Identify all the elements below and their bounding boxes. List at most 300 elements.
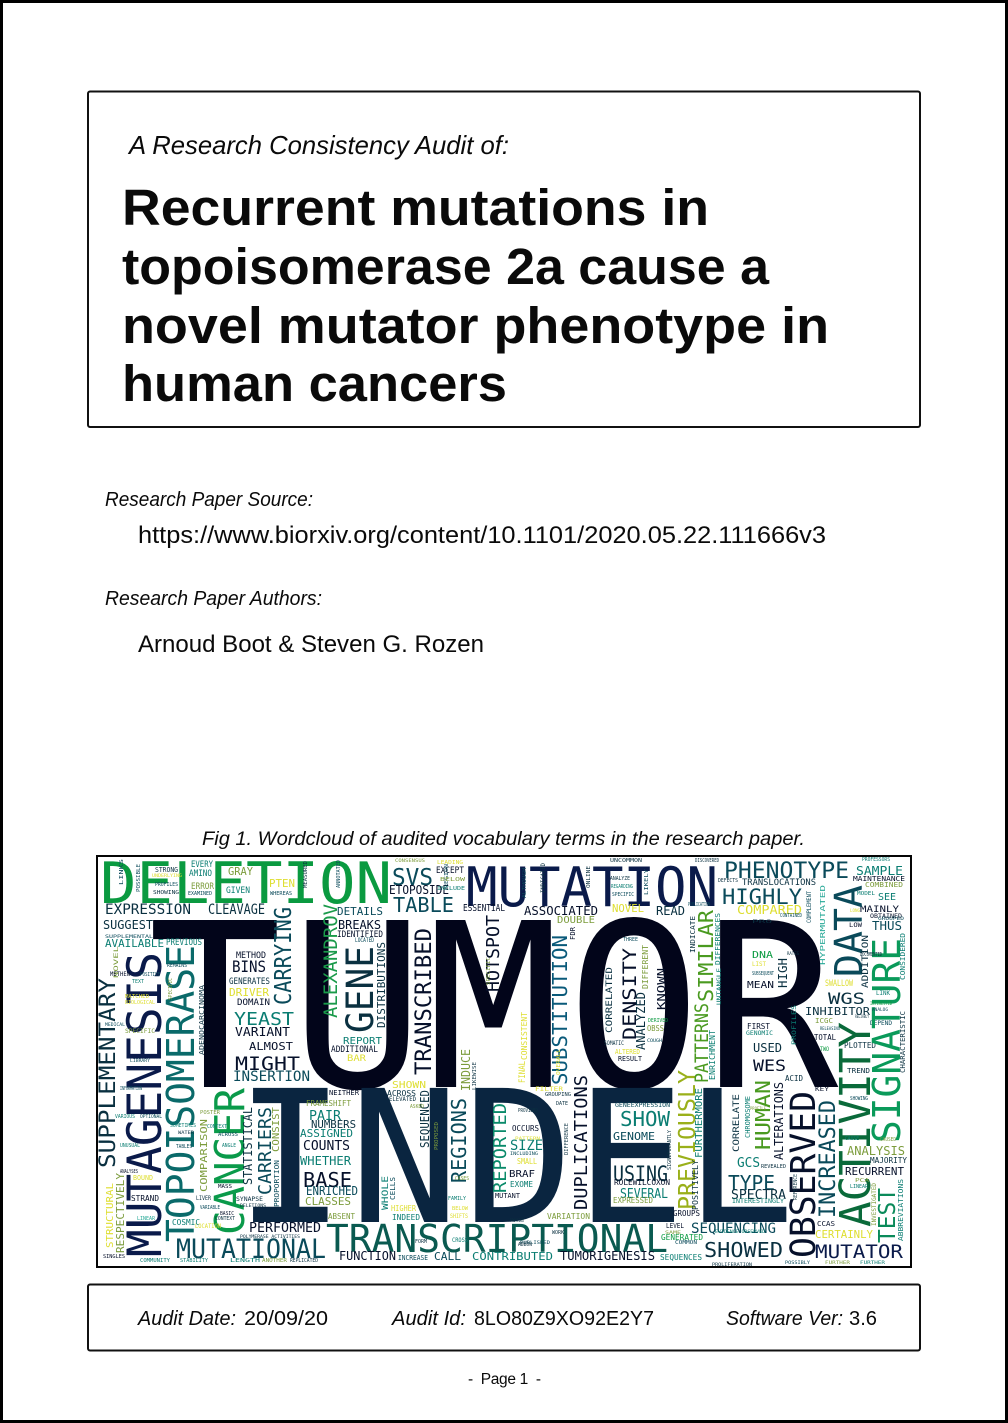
wordcloud: ASSOCIATED bbox=[524, 904, 598, 918]
rotated words: CONSIDERED bbox=[899, 933, 907, 980]
wordcloud: SOMATIC bbox=[604, 1040, 624, 1047]
wordcloud: EVERY bbox=[191, 860, 213, 870]
wordcloud: ACID bbox=[785, 1074, 803, 1083]
wordcloud: ELEVATED bbox=[389, 1096, 416, 1103]
wordcloud: MAINTENANCE bbox=[853, 875, 905, 883]
wordcloud: COMPARED bbox=[737, 903, 802, 917]
rotated words: CHARACTERISTIC bbox=[899, 1011, 907, 1073]
wordcloud: DELETION bbox=[100, 851, 392, 917]
wordcloud: TUMORIGENESIS bbox=[560, 1249, 655, 1263]
rotated words: INVESTIGATED bbox=[871, 1183, 878, 1226]
wordcloud: USING bbox=[613, 1162, 668, 1186]
rotated words: POSSIBLE bbox=[136, 864, 142, 892]
audit date: 20/09/20 bbox=[244, 1308, 328, 1330]
wordcloud: TWO bbox=[820, 1046, 829, 1053]
rotated words: PROPORTION bbox=[273, 1160, 281, 1207]
wordcloud: MUTATOR bbox=[815, 1241, 904, 1263]
rotated words: NOVEL bbox=[113, 945, 120, 978]
wordcloud: PERFORMED bbox=[249, 1221, 321, 1236]
wordcloud: SAMPLE bbox=[856, 864, 903, 878]
wordcloud: PTEN bbox=[269, 877, 295, 890]
small scattered words: CONTEXT bbox=[215, 1216, 235, 1222]
small scattered words: PROLIFERATION bbox=[712, 1262, 753, 1267]
wordcloud: SEVERAL bbox=[620, 1187, 668, 1202]
rotated words: ADDITION bbox=[861, 935, 871, 988]
small scattered words: SHOWING bbox=[850, 1096, 868, 1102]
wordcloud: ADDITIONAL bbox=[331, 1045, 378, 1055]
wordcloud: SMALL bbox=[517, 1157, 537, 1166]
wordcloud: DOMAIN bbox=[237, 998, 270, 1008]
small scattered words: RELEASING bbox=[820, 1026, 841, 1031]
rotated words: FURTHERMORE bbox=[694, 1088, 705, 1158]
rotated words: ANALYZED bbox=[634, 992, 648, 1050]
small scattered words: MATCHED bbox=[125, 994, 149, 1000]
small scattered words: MASS bbox=[218, 1184, 232, 1190]
small scattered words: WORK bbox=[552, 1230, 564, 1236]
wordcloud: HIGHLY bbox=[722, 885, 802, 909]
wordcloud: YEAST bbox=[234, 1009, 294, 1030]
small scattered words: TABLES bbox=[176, 1144, 192, 1150]
rotated words: KNOWN bbox=[655, 968, 668, 1010]
rotated words: ONLINE bbox=[586, 866, 592, 888]
wordcloud: SUGGEST bbox=[103, 918, 153, 932]
paper authors: Arnoud Boot & Steven G. Rozen bbox=[138, 631, 484, 658]
wordcloud: PAIR bbox=[309, 1109, 341, 1124]
wordcloud: STRAND bbox=[131, 1194, 159, 1203]
main title: topoisomerase 2a cause a bbox=[122, 238, 770, 295]
rotated words: REFERENCE bbox=[793, 1174, 799, 1200]
wordcloud: ALTERED bbox=[615, 1048, 640, 1056]
wordcloud: BRAF bbox=[509, 1169, 535, 1180]
rotated words: INDUCE bbox=[459, 1049, 473, 1091]
title panel bbox=[88, 92, 920, 427]
wordcloud: SEQUENCES bbox=[660, 1253, 702, 1262]
rotated words: HOTSPOT bbox=[483, 915, 504, 992]
wordcloud: FUNCTION bbox=[339, 1249, 396, 1263]
rotated words: CONSISTENT bbox=[520, 1012, 529, 1060]
small scattered words: ANALYZE bbox=[610, 876, 630, 882]
small scattered words: FURTHER bbox=[825, 1260, 851, 1265]
rotated words: SPECIFIC bbox=[486, 957, 492, 985]
software version: Software Ver: bbox=[726, 1308, 843, 1330]
small scattered words: SPECIFIC bbox=[612, 892, 634, 898]
small scattered words: DOCUMENTED bbox=[860, 952, 882, 958]
rotated words: LINKS bbox=[119, 859, 125, 885]
small scattered words: BELOW bbox=[440, 877, 467, 883]
wordcloud: TREND bbox=[847, 1067, 870, 1075]
rotated words: SIGNIFICANTLY bbox=[667, 1130, 673, 1170]
small scattered words: VARIOUS bbox=[115, 1114, 135, 1120]
small scattered words: COUGH bbox=[647, 1038, 663, 1043]
wordcloud: IDENTIFIED bbox=[337, 930, 383, 940]
wordcloud: CONTRIBUTED bbox=[472, 1250, 553, 1263]
paper source: https://www.biorxiv.org/content/10.1101/2020.05.22.111666v3 bbox=[138, 522, 826, 549]
small scattered words: CAUSE bbox=[845, 1136, 859, 1142]
wordcloud: GENERATES bbox=[229, 977, 270, 987]
main title: Recurrent mutations in bbox=[122, 179, 709, 236]
wordcloud: MUTATION bbox=[466, 856, 718, 919]
wordcloud: TYPE bbox=[728, 1171, 775, 1195]
wordcloud: THREE bbox=[623, 937, 638, 943]
figure caption: Fig 1. Wordcloud of audited vocabulary terms in the research paper. bbox=[202, 828, 805, 850]
small scattered words: PATTERN bbox=[515, 1136, 541, 1141]
small scattered words: DELETIONS bbox=[240, 1203, 267, 1208]
small scattered words: CAUSED bbox=[880, 1137, 896, 1143]
small scattered words: CONSENSUS bbox=[395, 858, 426, 863]
wordcloud: LIVER bbox=[196, 1195, 211, 1202]
wordcloud: OBTAINED bbox=[870, 913, 902, 920]
software version: 3.6 bbox=[849, 1308, 877, 1330]
wordcloud: VARIATION bbox=[547, 1212, 590, 1221]
wordcloud: NEITHER bbox=[329, 1089, 360, 1097]
rotated words: TOPOISOMERASE bbox=[159, 945, 203, 1242]
small scattered words: SHIFTS bbox=[450, 1213, 468, 1220]
wordcloud: LEVEL bbox=[666, 1222, 684, 1230]
wordcloud: RESULT bbox=[618, 1055, 643, 1063]
small scattered words: UNUSUAL bbox=[120, 1143, 140, 1149]
wordcloud: BAR bbox=[347, 1054, 367, 1064]
small scattered words: LONG bbox=[850, 908, 861, 913]
wordcloud: ICGC bbox=[815, 1017, 833, 1025]
wordcloud: INCREASE bbox=[398, 1254, 428, 1262]
small scattered words: SUBSEQUENT bbox=[752, 971, 774, 977]
small scattered words: TEXT bbox=[132, 979, 144, 985]
wordcloud: COMBINED bbox=[865, 881, 903, 889]
wordcloud: EXCEPT bbox=[436, 866, 464, 876]
wordcloud: OCCURS bbox=[512, 1124, 539, 1133]
rotated words: LIKEWISE bbox=[472, 1062, 478, 1090]
wordcloud: SVS bbox=[392, 865, 433, 891]
wordcloud: METHOD bbox=[236, 951, 266, 961]
small scattered words: CROSS bbox=[452, 1237, 468, 1244]
small scattered words: PROVIDED bbox=[510, 1218, 524, 1223]
footer panel bbox=[88, 1284, 920, 1350]
small scattered words: LOCATION bbox=[195, 1223, 221, 1230]
wordcloud: SPECTRA bbox=[731, 1188, 786, 1203]
wordcloud: SEQUENCING bbox=[691, 1221, 776, 1237]
small scattered words: ALLOW bbox=[518, 1242, 533, 1248]
wordcloud: MAJORITY bbox=[870, 1156, 907, 1165]
small scattered words: ACROSS bbox=[218, 1132, 238, 1138]
wordcloud: THUS bbox=[872, 919, 902, 933]
wordcloud: TRANSLOCATIONS bbox=[742, 878, 816, 888]
wordcloud: ANALYSIS bbox=[847, 1144, 905, 1158]
rotated words: SEQUENCED bbox=[418, 1090, 432, 1148]
wordcloud: LINK bbox=[876, 990, 890, 997]
small scattered words: DEFECTS bbox=[718, 878, 738, 884]
rotated words: DUPLICATIONS bbox=[571, 1075, 592, 1210]
rotated words: INCREASED bbox=[816, 1100, 841, 1218]
wordcloud bbox=[96, 851, 911, 1267]
small scattered words: SUPPLEMENTAL bbox=[105, 934, 154, 939]
small scattered words: UNDERLYING bbox=[152, 873, 183, 878]
small scattered words: ANGLE bbox=[222, 1143, 236, 1149]
wordcloud: INSERTION bbox=[233, 1069, 310, 1085]
small scattered words: DERIVED bbox=[648, 1018, 668, 1024]
wordcloud: AVAILABLE bbox=[105, 937, 164, 950]
rotated words: GENE bbox=[339, 946, 382, 1033]
small scattered words: PROFILES bbox=[155, 882, 178, 888]
small scattered words: COMMUNITY bbox=[140, 1258, 170, 1264]
small scattered words: MODEL bbox=[857, 891, 875, 897]
rotated words: SIGNATURE bbox=[865, 938, 909, 1143]
audit id: 8LO80Z9XO92E2Y7 bbox=[474, 1308, 654, 1330]
wordcloud: SYNAPSE bbox=[236, 1196, 263, 1203]
main title: novel mutator phenotype in bbox=[122, 297, 829, 354]
rotated words: REGIONS bbox=[447, 1098, 471, 1183]
wordcloud: CLEAVAGE bbox=[208, 902, 265, 918]
small scattered words: POLYMERASE ACTIVITIES bbox=[240, 1234, 301, 1239]
rotated words: ANNOTATED bbox=[336, 860, 342, 888]
rotated words: ALEXANDROV bbox=[320, 904, 342, 1018]
rotated words: ALTHOUGH bbox=[522, 868, 528, 898]
rotated words: MEASURED bbox=[303, 861, 309, 888]
small scattered words: BIOLOGICAL bbox=[125, 1000, 155, 1006]
small scattered words: CONTAINED bbox=[780, 913, 802, 919]
wordcloud: ALMOST bbox=[249, 1040, 293, 1053]
wordcloud: SHOW bbox=[620, 1107, 671, 1131]
rotated words: HUMAN bbox=[751, 1080, 775, 1150]
small scattered words: FORM bbox=[415, 1239, 427, 1245]
small scattered words: ANALYSES bbox=[120, 1169, 138, 1175]
small scattered words: POSTER bbox=[200, 1110, 221, 1116]
rotated words: STRUCTURAL bbox=[105, 1183, 116, 1248]
small scattered words: BOUND bbox=[133, 1174, 153, 1182]
rotated words: WHOLE bbox=[381, 1176, 391, 1210]
small scattered words: WATER bbox=[178, 1130, 195, 1135]
small scattered words: PUBLICATION bbox=[688, 902, 710, 908]
small scattered words: UNCOMMON bbox=[610, 858, 642, 864]
wordcloud: DRIVER bbox=[229, 986, 269, 999]
rotated words: OBSERVED bbox=[784, 1091, 824, 1258]
wordcloud: FRAMESHIFT bbox=[306, 1099, 351, 1108]
wordcloud: GENOME bbox=[613, 1130, 655, 1143]
wordcloud: INHIBITOR bbox=[805, 1005, 870, 1018]
rotated words: TEST bbox=[875, 1188, 901, 1243]
wordcloud: REPORT bbox=[343, 1036, 382, 1047]
wordcloud: FIRST bbox=[747, 1022, 770, 1031]
wordcloud: ABSENT bbox=[328, 1212, 355, 1221]
wordcloud: SEE bbox=[878, 892, 896, 903]
rotated words: SUBSTITUTION bbox=[548, 935, 572, 1085]
rotated words: DENSITY bbox=[619, 947, 641, 1040]
rotated words: CHROMOSOME bbox=[744, 1096, 752, 1138]
small scattered words: SINGLES bbox=[103, 1254, 125, 1260]
small scattered words: SOMETIMES bbox=[170, 1123, 196, 1129]
rotated words: ALTERATIONS bbox=[772, 1082, 786, 1160]
wordcloud: SIZE bbox=[510, 1138, 543, 1154]
wordcloud: WGS bbox=[828, 989, 865, 1008]
wordcloud: CERTAINLY bbox=[815, 1228, 873, 1241]
small scattered words: REPLICATED bbox=[290, 1258, 318, 1264]
rotated words: ABBREVIATIONS bbox=[897, 1179, 905, 1241]
rotated words: COMPARISON bbox=[199, 1119, 210, 1192]
small scattered words: METHEN bbox=[110, 971, 130, 978]
wordcloud: MUTANT bbox=[495, 1192, 521, 1200]
small scattered words: PCA bbox=[855, 1178, 869, 1184]
small scattered words: REGARDING bbox=[611, 884, 633, 890]
wordcloud: COSMIC bbox=[172, 1218, 200, 1227]
wordcloud: MUTATIONAL bbox=[176, 1234, 326, 1265]
wordcloud: DEPEND bbox=[870, 1020, 892, 1027]
small scattered words: GROUPED bbox=[878, 916, 905, 921]
audit id bbox=[391, 1308, 654, 1330]
wordcloud: DETAILS bbox=[337, 905, 383, 918]
wordcloud: READ bbox=[656, 904, 685, 918]
rotated words: DISTRIBUTIONS bbox=[375, 942, 388, 1028]
small scattered words: INCLUDING bbox=[510, 1151, 539, 1156]
wordcloud: KEY bbox=[815, 1086, 829, 1093]
small scattered words: ASKED bbox=[410, 1104, 424, 1110]
rotated words: COMPLEMENT bbox=[806, 891, 813, 923]
small scattered words: DISCOVERED bbox=[695, 858, 719, 864]
small scattered words: PROVIDED bbox=[518, 1108, 538, 1114]
small scattered words: LINEAR bbox=[137, 1216, 156, 1222]
wordcloud: DNA bbox=[752, 950, 773, 961]
subtitle: A Research Consistency Audit of: bbox=[127, 130, 509, 160]
wordcloud: EXPRESSED bbox=[613, 1196, 653, 1205]
wordcloud: MEAN bbox=[747, 980, 774, 991]
wordcloud: BINS bbox=[232, 957, 266, 976]
wordcloud: ENRICHED bbox=[306, 1184, 358, 1198]
rotated words bbox=[96, 859, 909, 1258]
rotated words: HYPERMUTATED bbox=[819, 885, 827, 965]
rotated words: SIMILAR bbox=[694, 909, 718, 1002]
wordcloud: GROUPS bbox=[673, 1209, 700, 1218]
small scattered words: FILTER bbox=[535, 1086, 563, 1093]
small scattered words: CASES bbox=[455, 1176, 469, 1182]
rotated words: CANCER bbox=[206, 1088, 254, 1235]
rotated words: PROFILES bbox=[791, 1004, 798, 1045]
small scattered words: VARIABLE bbox=[200, 1205, 220, 1211]
page number: - Page 1 - bbox=[468, 1371, 541, 1388]
paper source: Research Paper Source: bbox=[105, 489, 313, 511]
audit id: Audit Id: bbox=[391, 1308, 466, 1330]
rotated words: UNTANGLE bbox=[716, 968, 723, 1005]
rotated words: REPORTED bbox=[490, 1103, 511, 1193]
wordcloud: PHENOTYPE bbox=[724, 859, 849, 884]
small scattered words: COMMON bbox=[675, 1240, 697, 1246]
small scattered words: OPTIONAL bbox=[140, 1114, 162, 1120]
small scattered words: PRO bbox=[752, 919, 774, 924]
small scattered words: RATES bbox=[787, 951, 800, 956]
wordcloud: COUNTS bbox=[303, 1139, 350, 1154]
small scattered words: POSITIVE bbox=[140, 972, 160, 978]
wordcloud: RECURRENT bbox=[845, 1165, 904, 1178]
main title bbox=[122, 179, 829, 412]
small scattered words: CONTEXT bbox=[207, 1124, 227, 1130]
wordcloud: OBSS bbox=[647, 1024, 664, 1033]
small scattered words: SPECIFIC bbox=[125, 1028, 155, 1035]
wordcloud: INDEL bbox=[235, 1052, 795, 1266]
small scattered words: REMAINS bbox=[167, 963, 187, 969]
wordcloud: ETOPOSIDE bbox=[389, 883, 449, 897]
wordcloud: INDEED bbox=[392, 1213, 420, 1222]
rotated words: INDICATE bbox=[689, 916, 697, 953]
rotated words: CARRIERS bbox=[255, 1107, 276, 1195]
audit date: Audit Date: bbox=[137, 1308, 236, 1330]
small scattered words: LIBRARY bbox=[130, 1058, 151, 1063]
small scattered words: MEDICAL bbox=[105, 1022, 126, 1027]
rotated words: SUPPLEMENTARY bbox=[96, 978, 121, 1168]
wordcloud: ASSIGNED bbox=[300, 1127, 353, 1140]
small scattered words: PUBLISHED bbox=[520, 1240, 551, 1245]
small scattered words: ANOTHER bbox=[262, 1258, 288, 1264]
wordcloud: GENERATED bbox=[661, 1233, 703, 1242]
wordcloud: VARIANT bbox=[235, 1025, 290, 1039]
wordcloud: DOUBLE bbox=[557, 915, 595, 926]
wordcloud: PREVIOUS bbox=[166, 938, 202, 948]
rotated words: STATISTICAL bbox=[241, 1107, 255, 1185]
rotated words: ENRICHMENT bbox=[708, 1030, 717, 1080]
rotated words: DATA bbox=[827, 885, 871, 977]
small scattered words: STABILITY bbox=[180, 1258, 208, 1264]
wordcloud: NUMBERS bbox=[311, 1118, 356, 1131]
wordcloud: TUMOR bbox=[148, 876, 839, 1142]
small scattered words: PART bbox=[520, 1241, 528, 1246]
wordcloud: ROLEWILCOXON bbox=[614, 1178, 670, 1187]
wordcloud: MIGHT bbox=[235, 1053, 300, 1075]
small scattered words: BELOW bbox=[452, 1206, 469, 1212]
rotated words: CARRYING bbox=[271, 907, 297, 1005]
small scattered words: SAME bbox=[665, 1230, 682, 1235]
wordcloud: ACROSS bbox=[387, 1089, 416, 1098]
rotated words: CORRELATED bbox=[605, 967, 615, 1033]
rotated words: DIFFERENCE bbox=[564, 1123, 570, 1155]
rotated words: TRANSCRIBED bbox=[412, 928, 437, 1075]
wordcloud: GRAY bbox=[228, 865, 253, 878]
small scattered words: INTERESTED bbox=[870, 1001, 893, 1006]
wordcloud: BREAKS bbox=[338, 918, 381, 932]
paper authors bbox=[105, 588, 484, 658]
rotated words: CELLS bbox=[389, 1177, 397, 1200]
rotated words: DIFFERENT bbox=[641, 945, 650, 989]
wordcloud: LOW bbox=[849, 922, 862, 929]
wordcloud: INTERESTINGLY bbox=[732, 1198, 784, 1205]
small scattered words: WHEREAS bbox=[270, 891, 292, 897]
small scattered words: EVIDENCE OBSERVED bbox=[715, 1229, 766, 1234]
rotated words: CONSIST bbox=[271, 1107, 282, 1152]
wordcloud: WES bbox=[753, 1056, 786, 1075]
small scattered words: LINEAR bbox=[850, 1184, 869, 1190]
wordcloud: STRONG bbox=[155, 866, 178, 874]
rotated words: INDICATED bbox=[540, 863, 547, 893]
small scattered words: SHOWING bbox=[153, 890, 179, 896]
wordcloud: EXOME bbox=[510, 1180, 533, 1189]
small scattered words: ANALOG bbox=[872, 1007, 889, 1012]
wordcloud: USED bbox=[753, 1041, 782, 1055]
small scattered words: GROUPING bbox=[545, 1092, 571, 1098]
small scattered words: FAMILY bbox=[448, 1196, 466, 1202]
rotated words: PATTERNS bbox=[691, 1003, 713, 1083]
paper source bbox=[105, 489, 826, 549]
wordcloud: AMINO bbox=[189, 869, 212, 879]
wordcloud: CLASSES bbox=[305, 1195, 351, 1208]
small scattered words: RELIABLY bbox=[855, 1014, 869, 1019]
rotated words: HIGH bbox=[776, 958, 790, 988]
small scattered words: BASIC bbox=[220, 1211, 234, 1217]
wordcloud: CCAS bbox=[817, 1220, 835, 1228]
small scattered words: DATE bbox=[556, 1101, 568, 1107]
wordcloud: SHOWN bbox=[392, 1080, 426, 1091]
wordcloud: WHETHER bbox=[300, 1154, 352, 1168]
wordcloud: HIGHER bbox=[391, 1204, 416, 1213]
small scattered words: PROFILE bbox=[750, 1106, 767, 1111]
rotated words: ADENOCARCINOMA bbox=[198, 984, 206, 1055]
rotated words: POSITIVELY bbox=[691, 1160, 700, 1210]
wordcloud: SWALLOW bbox=[825, 979, 853, 989]
wordcloud: BASE bbox=[303, 1168, 352, 1192]
